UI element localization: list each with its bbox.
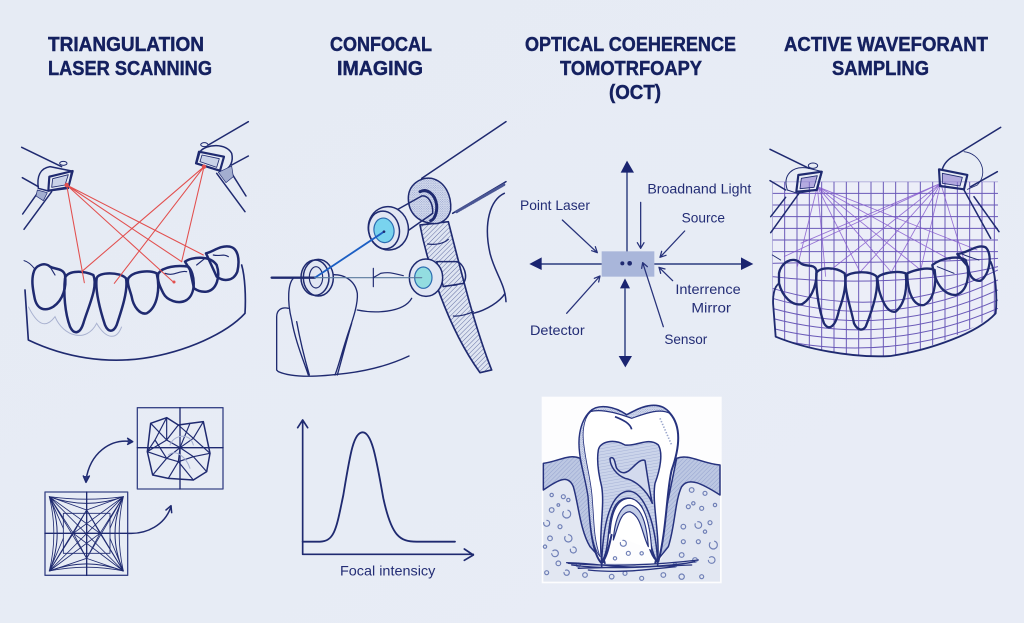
left scanner [22,147,73,229]
gums [543,457,720,563]
title: active waveform sampling: SAMPLING [832,58,929,80]
panel: active wavefront dental arch [770,127,1001,358]
tooth outline [277,275,412,376]
lower lens [409,259,465,296]
component labels: Point Laser [520,197,590,213]
component labels: Sensor [664,331,708,347]
title: active waveform sampling [784,34,988,80]
teeth [772,246,990,330]
component labels: Broadnand Light [647,180,751,196]
curved arrow between meshes [83,438,133,482]
component labels [520,180,751,347]
panel: focal intensity chart [298,420,473,579]
title: optical coherence tomography: (OCT) [609,82,661,104]
curved arrow to target mesh [128,506,172,533]
central interferometer block [602,251,654,277]
title: triangulation laser scanning [48,34,212,80]
callout arrows [562,202,685,327]
title: confocal imaging: CONFOCAL [330,34,432,56]
panel: OCT tooth cross-section [542,397,722,583]
target mesh grid [137,408,223,489]
title: confocal imaging: IMAGING [337,58,423,80]
component labels: Source [682,210,725,226]
red laser rays [65,165,206,283]
title: confocal imaging [330,34,432,80]
source mesh grid [45,492,128,575]
axes [298,420,473,560]
title: optical coherence tomography: OPTICAL COEHERENCE [525,34,736,56]
blue and green beams [272,230,422,287]
image background [542,397,722,583]
purple scan rays [784,183,977,277]
gum line and jaw [24,261,245,360]
panel: triangulation dental arch with scanners [22,122,248,360]
tooth body [579,406,678,563]
title: triangulation laser scanning: LASER SCANNING [48,58,212,80]
component labels: Interrence [675,281,741,297]
left wavefront scanner [770,149,822,233]
axis label: Focal intensicy [340,563,435,579]
title: optical coherence tomography: TOMOTRFOAPY [560,58,703,80]
teeth [32,246,239,332]
title: triangulation laser scanning: TRIANGULATION [48,34,204,56]
panel: OCT schematic [520,161,753,367]
deformed wavefront mesh [772,182,998,358]
component labels: Mirror [691,300,731,316]
panel: confocal optical scanner [272,122,506,376]
focal pinhole disc [301,259,333,296]
pulp chamber and root canals [598,441,661,562]
bone [543,479,720,582]
title: optical coherence tomography [525,34,736,104]
handpiece body [408,122,506,373]
upper lens [365,196,433,253]
jaw outline [773,262,996,356]
main axis arrows [529,161,753,367]
intensity curve [303,432,455,542]
apical nerve bundle [567,553,698,571]
right wavefront scanner [939,127,1001,238]
right scanner [196,122,248,212]
title: active waveform sampling: ACTIVE WAVEFORANT [784,34,988,56]
panel: triangulation mesh registration [45,408,223,575]
component labels: Detector [530,322,585,338]
